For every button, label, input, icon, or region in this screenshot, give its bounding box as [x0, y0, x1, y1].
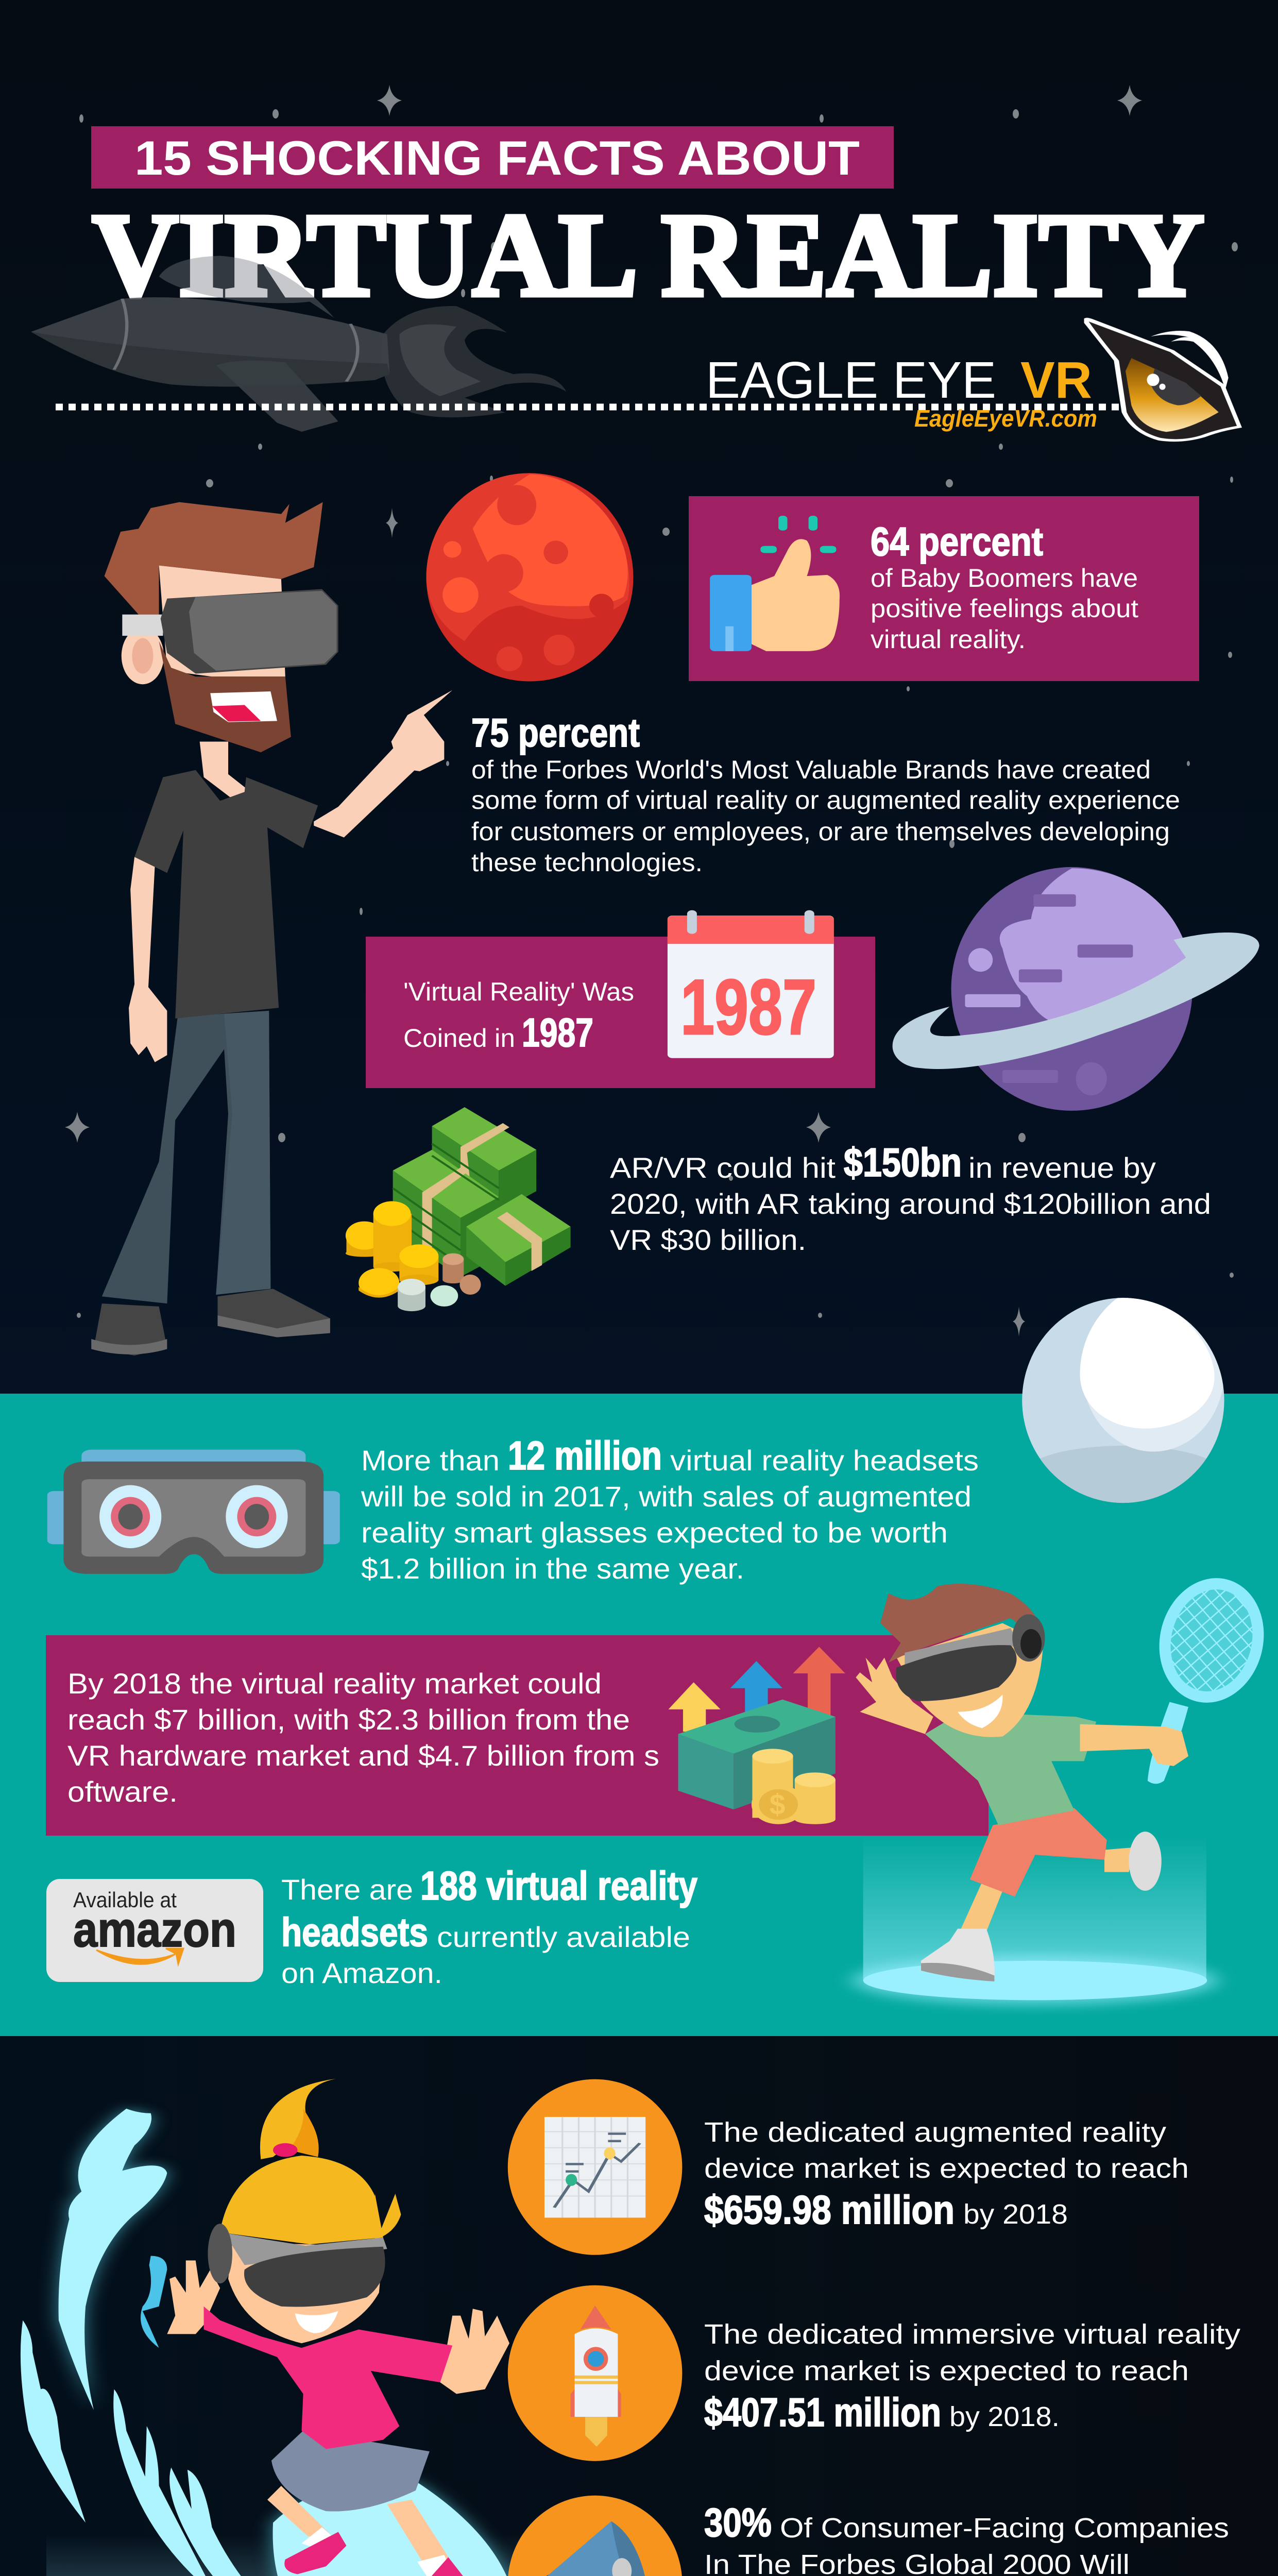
- text: AR device market: [704, 2117, 1189, 2232]
- text: market forecast: oftware.: [67, 1775, 178, 1808]
- text: AR/VR revenue: VR $30 billion.: [610, 1224, 806, 1256]
- icon: eagle eye: [1084, 318, 1242, 442]
- illustration: portal beam under girl: [44, 2535, 528, 2576]
- icon: calendar 1987: [668, 910, 834, 1058]
- icon: megaphone in circle: [508, 2496, 682, 2576]
- text: AR device market: by 2018: [963, 2199, 1068, 2230]
- amazon badge: Available at: [73, 1888, 177, 1912]
- text: immersive device market: The dedicated immersive virtual reality: [704, 2319, 1240, 2350]
- text: forbes brands: these technologies.: [471, 848, 703, 877]
- text: 188 headsets on amazon: [281, 1863, 697, 1989]
- icon: rocket in circle: [508, 2285, 682, 2461]
- text: 188 headsets on amazon: There are: [281, 1873, 413, 1906]
- logo wordmark: EAGLE EYE: [706, 351, 996, 409]
- text: consumer-facing companies: [704, 2500, 1229, 2576]
- illustration: purple planet with ring: [893, 867, 1259, 1111]
- text: market forecast: VR hardware market and $4.7 billion from s: [67, 1739, 659, 1772]
- illustration: money stacks and coins: [346, 1107, 571, 1311]
- background: dark section with girl: [0, 2036, 1278, 2576]
- icon: thumbs up: [710, 516, 840, 651]
- amazon badge: [46, 1879, 263, 1982]
- background: top dark space section: [0, 0, 1278, 1394]
- title: 15 shocking facts about: 15 SHOCKING FACTS ABOUT: [134, 131, 860, 185]
- text: immersive device market: device market is expected to reach: [704, 2355, 1189, 2386]
- title: virtual reality: VIRTUAL REALITY: [92, 189, 1204, 321]
- illustration: girl on glowing surfboard: [21, 2079, 518, 2576]
- text: 12 million headsets: 12 million: [508, 1433, 662, 1478]
- text: 12 million headsets: reality smart glasses expected to be worth: [361, 1516, 948, 1549]
- text: AR/VR revenue: in revenue by: [968, 1151, 1156, 1184]
- illustration: ghost rocket: [31, 256, 567, 432]
- text: 188 headsets on amazon: 188 virtual reality: [420, 1863, 697, 1908]
- amazon badge: amazon: [73, 1902, 236, 1957]
- text: AR/VR revenue: AR/VR could hit: [610, 1151, 836, 1184]
- racket head: [1146, 1567, 1277, 1714]
- panel: virtual reality coined in 1987: [366, 910, 875, 1088]
- text: 188 headsets on amazon: headsets: [281, 1909, 428, 1955]
- logo VR: VR: [1020, 351, 1092, 409]
- icon: calendar 1987: 1987: [680, 963, 816, 1051]
- illustration: boy with VR and tennis racket: [856, 1567, 1277, 1981]
- icon: growth chart in circle: [508, 2079, 682, 2255]
- background stars: [65, 85, 1238, 1336]
- text: consumer-facing companies: 30%: [704, 2500, 772, 2545]
- text: 188 headsets on amazon: currently available: [437, 1921, 690, 1953]
- illustration: moon: [1022, 1292, 1224, 1505]
- panel: 64 percent of baby boomers: [689, 496, 1199, 681]
- text: coined: [403, 977, 634, 1055]
- text: AR/VR revenue: 2020, with AR taking around $120billion and: [610, 1188, 1211, 1220]
- text: AR device market: $659.98 million: [704, 2187, 955, 2232]
- text: coined: 1987: [522, 1010, 593, 1055]
- text: 12 million headsets: More than: [361, 1444, 500, 1477]
- illustration: red planet: [427, 473, 633, 681]
- text: coined: 'Virtual Reality' Was: [403, 977, 634, 1006]
- text: market forecast: By 2018 the virtual reality market could: [67, 1667, 602, 1700]
- block: immersive VR market: [508, 2285, 1240, 2461]
- panel: 2018 VR market: [46, 1635, 989, 1836]
- logo url: EagleEyeVR.com: [914, 405, 1097, 432]
- text: baby boomers: [871, 564, 1138, 654]
- dotted divider: [56, 404, 1126, 410]
- icon: money with rising arrows: $: [770, 1788, 785, 1821]
- text: 188 headsets on amazon: on Amazon.: [281, 1957, 442, 1989]
- block: 30 percent of companies: [508, 2496, 1229, 2576]
- heading: 64 percent: 64 percent: [871, 519, 1043, 564]
- text: AR/VR revenue: [610, 1140, 1211, 1256]
- block: 75 percent of brands: [471, 710, 1180, 877]
- text: AR/VR revenue: $150bn: [844, 1140, 962, 1185]
- text: baby boomers: virtual reality.: [871, 625, 1026, 654]
- text: baby boomers: positive feelings about: [871, 594, 1138, 623]
- illustration: portal under boy: [852, 1835, 1219, 2005]
- title banner: [91, 126, 894, 189]
- text: forbes brands: some form of virtual reality or augmented reality experience: [471, 786, 1180, 815]
- text: 12 million headsets: [361, 1433, 979, 1585]
- heading: 75 percent: 75 percent: [471, 710, 640, 755]
- text: immersive device market: by 2018.: [949, 2401, 1060, 2432]
- illustration: man with VR headset pointing: [91, 502, 452, 1355]
- text: immersive device market: [704, 2319, 1240, 2435]
- text: market forecast: reach $7 billion, with $2.3 billion from the: [67, 1703, 630, 1736]
- text: forbes brands: for customers or employees, or are themselves developing: [471, 817, 1170, 846]
- text: AR device market: The dedicated augmented reality: [704, 2117, 1166, 2148]
- text: forbes brands: of the Forbes World's Most Valuable Brands have created: [471, 755, 1151, 784]
- icon: VR headset front: [47, 1450, 340, 1574]
- text: 12 million headsets: virtual reality headsets: [670, 1444, 979, 1477]
- text: 12 million headsets: will be sold in 2017, with sales of augmented: [361, 1480, 972, 1513]
- block: augmented reality market: [508, 2079, 1189, 2255]
- text: coined: Coined in: [403, 1024, 515, 1053]
- text: forbes brands: [471, 755, 1180, 877]
- background: teal section: [0, 1394, 1278, 2036]
- text: baby boomers: of Baby Boomers have: [871, 564, 1138, 592]
- text: market forecast: [67, 1667, 659, 1808]
- text: immersive device market: $407.51 million: [704, 2389, 941, 2435]
- text: AR device market: device market is expected to reach: [704, 2153, 1189, 2184]
- text: 12 million headsets: $1.2 billion in the same year.: [361, 1552, 744, 1585]
- icon: money with rising arrows: [668, 1647, 845, 1824]
- text: consumer-facing companies: Of Consumer-Facing Companies: [780, 2513, 1229, 2544]
- boy figure: [856, 1584, 1188, 1981]
- logo: Eagle Eye VR: [56, 318, 1242, 442]
